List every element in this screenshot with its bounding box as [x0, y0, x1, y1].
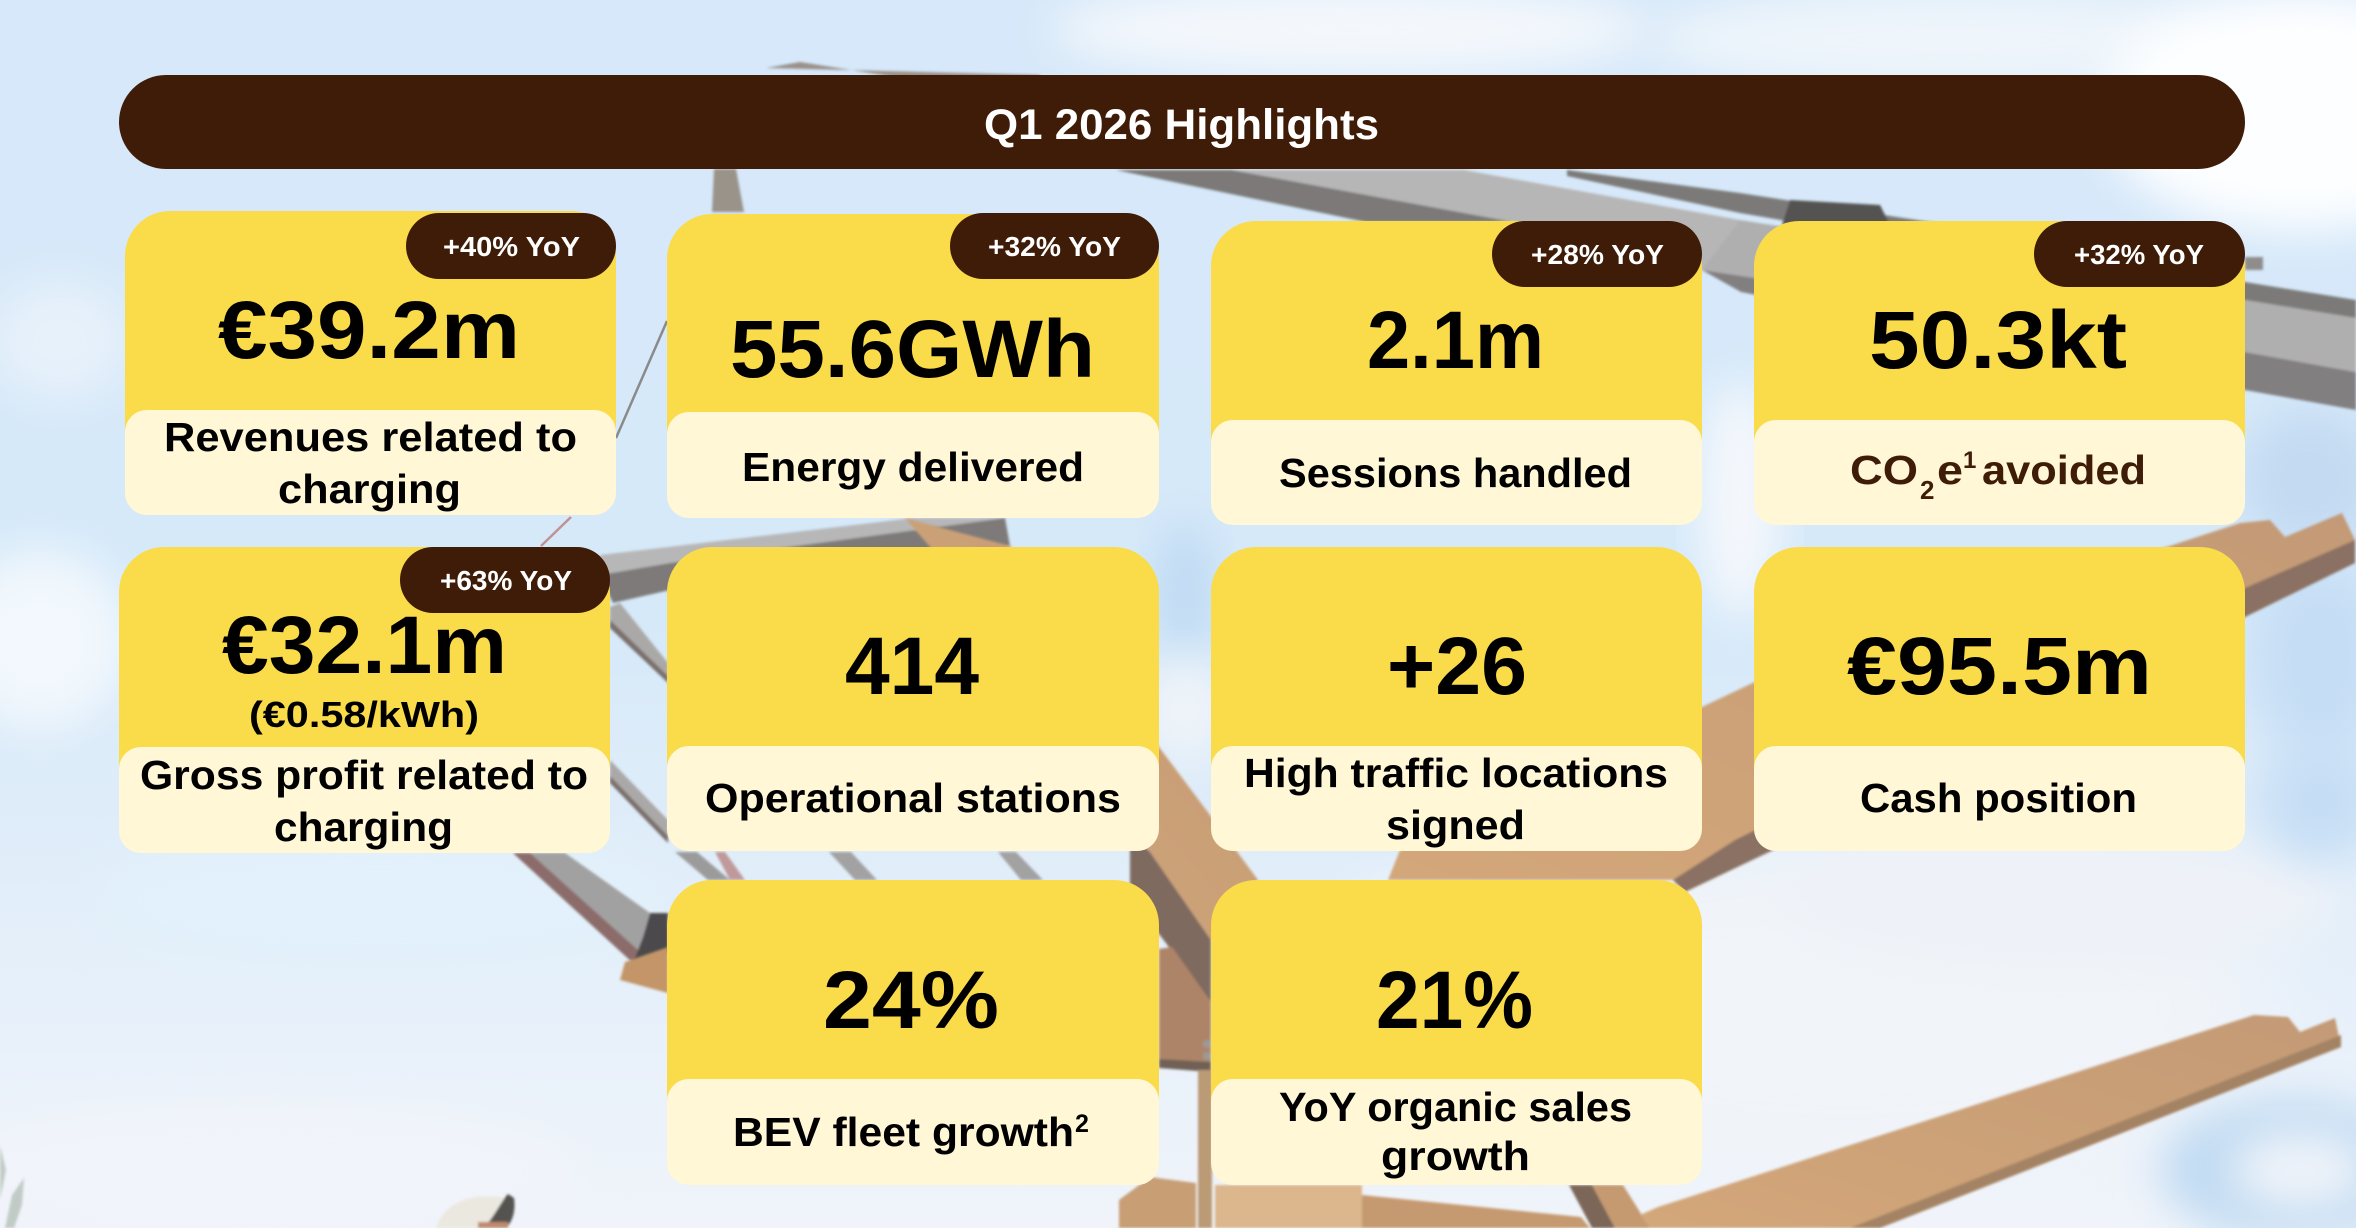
- card: cash: [1754, 547, 2245, 851]
- label: Operational stations: [705, 775, 1121, 821]
- badge text: +63% YoY: [440, 565, 572, 596]
- badge text: +28% YoY: [1531, 239, 1664, 270]
- card: locations signed: [1211, 547, 1702, 851]
- crane boom and hardware: [712, 62, 2356, 410]
- badge: [2034, 221, 2245, 287]
- footnote mark: 2: [1075, 1110, 1089, 1138]
- value: €32.1m: [222, 600, 507, 691]
- timber: low diagonal strut: [1592, 1185, 1650, 1228]
- label: Revenues related to: [164, 414, 577, 460]
- badge text: +32% YoY: [988, 231, 1121, 262]
- steel beams: [513, 518, 1043, 963]
- per kWh note: (€0.58/kWh): [249, 694, 479, 735]
- timber: small end block: [620, 947, 668, 993]
- tree at left edge: [0, 1145, 24, 1228]
- label: Cash position: [1860, 775, 2137, 821]
- value: 414: [845, 621, 979, 712]
- label panel: [1211, 746, 1702, 851]
- label: e: [1937, 447, 1963, 493]
- card: revenues: [125, 211, 616, 515]
- label: Energy delivered: [742, 444, 1084, 490]
- label line two: growth: [1381, 1133, 1530, 1179]
- label panel: [119, 747, 610, 853]
- timber: vertical post: [1215, 1185, 1362, 1228]
- label panel: [1211, 420, 1702, 525]
- label line two: charging: [274, 804, 453, 850]
- label panel: [667, 746, 1159, 851]
- label: 1: [1963, 447, 1976, 474]
- card: CO2e avoided: [1754, 221, 2245, 525]
- badge: [950, 213, 1159, 279]
- value: +26: [1387, 621, 1527, 712]
- value: €95.5m: [1847, 621, 2152, 712]
- label panel: [667, 1079, 1159, 1185]
- card: gross profit: [119, 547, 610, 853]
- badge: [400, 547, 610, 613]
- label: Sessions handled: [1279, 450, 1632, 496]
- label panel: [1754, 746, 2245, 851]
- card: sessions: [1211, 221, 1702, 525]
- value: €39.2m: [218, 285, 520, 376]
- timber: low left stub: [1119, 1177, 1196, 1228]
- timber frame beams: [620, 513, 2355, 1228]
- bolts: [1203, 1040, 1211, 1060]
- value: 55.6GWh: [730, 304, 1095, 395]
- label: High traffic locations: [1244, 750, 1668, 796]
- card: BEV fleet: [667, 880, 1159, 1185]
- label: avoided: [1982, 447, 2146, 493]
- worker helmet: [436, 1194, 515, 1228]
- label line two: signed: [1386, 802, 1525, 848]
- value: 50.3kt: [1869, 295, 2127, 386]
- timber: diagonal beam to upper right: [1388, 513, 2355, 892]
- badge text: +32% YoY: [2074, 239, 2204, 270]
- value: 21%: [1376, 955, 1533, 1046]
- label: 2: [1920, 475, 1934, 505]
- label line two: charging: [278, 466, 461, 512]
- card: organic sales: [1211, 880, 1702, 1185]
- label panel: [125, 410, 616, 515]
- card: stations: [667, 547, 1159, 851]
- timber: low horizontal beam: [1362, 1195, 1590, 1228]
- header bar: [119, 75, 2245, 169]
- badge text: +40% YoY: [443, 231, 580, 262]
- timber: beam shadow side: [1130, 830, 1211, 1002]
- label: CO: [1850, 447, 1918, 493]
- badge: [406, 213, 616, 279]
- label panel: [667, 412, 1159, 518]
- label: [1850, 447, 2146, 505]
- label panel: [1754, 420, 2245, 525]
- value: 24%: [823, 955, 999, 1046]
- timber: vertical post edge: [1198, 1070, 1212, 1228]
- value: 2.1m: [1367, 295, 1544, 386]
- badge: [1492, 221, 1702, 287]
- label: Gross profit related to: [140, 752, 588, 798]
- timber: dark strip: [1159, 1059, 1211, 1072]
- title: Q1 2026 Highlights: [984, 101, 1379, 149]
- label panel: [1211, 1079, 1702, 1185]
- timber: diagonal beam top: [905, 518, 1258, 940]
- timber: long lower right beam: [1640, 1015, 2341, 1228]
- card: energy: [667, 213, 1159, 518]
- timber: node block: [1159, 947, 1211, 1063]
- label: BEV fleet growth: [733, 1109, 1074, 1155]
- label: YoY organic sales: [1279, 1084, 1632, 1130]
- crane cables: [541, 321, 667, 546]
